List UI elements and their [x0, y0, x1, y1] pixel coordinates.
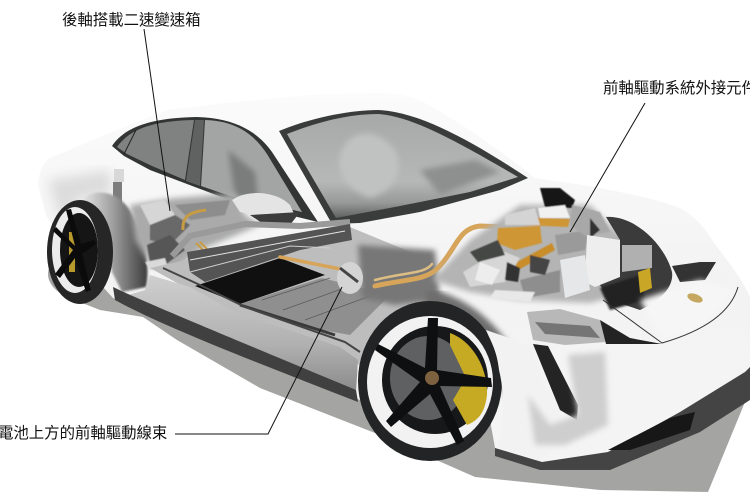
body shell [38, 93, 750, 468]
porsche crest [686, 292, 704, 304]
front wheel well [600, 217, 672, 310]
hood seam [603, 287, 738, 343]
callout: front drive harness above battery [0, 287, 342, 442]
wheel spokes [375, 318, 492, 445]
hood fade over lower front [640, 280, 735, 340]
callout: front drive external components [570, 79, 750, 232]
front splitter [495, 367, 750, 470]
front wheel well components [600, 245, 716, 310]
coolant tank [585, 235, 620, 287]
front wheel [358, 301, 502, 461]
side vent [533, 344, 578, 420]
callout: rear two-speed gearbox: 後軸搭載二速變速箱 [62, 11, 201, 29]
lower intake [608, 412, 695, 450]
brake caliper [450, 333, 487, 425]
callout: front drive harness above battery: 電池上方的前軸驅動線束 [0, 424, 167, 442]
battery pack [163, 224, 390, 352]
orange high-voltage cables [280, 226, 505, 286]
body side sill [125, 275, 358, 392]
front motor and accessories [432, 188, 640, 303]
rear side windows [112, 117, 318, 222]
rear motor to front tube [172, 222, 350, 256]
rear quarter shading [48, 170, 112, 220]
inverter cover [560, 255, 590, 298]
rear wheel [47, 200, 113, 304]
carbon air duct [528, 352, 608, 445]
car body [38, 93, 750, 470]
headlight [527, 309, 662, 345]
windshield and interior [279, 110, 528, 224]
motor hub at battery end [337, 262, 363, 294]
area under battery [150, 225, 430, 365]
rear strut [113, 182, 122, 205]
callout: rear two-speed gearbox [62, 11, 201, 211]
center mid components [358, 245, 440, 305]
rocker strip [113, 287, 358, 402]
rear motor and gearbox [130, 193, 300, 270]
ground shadow [48, 266, 745, 492]
rear wheel arch tread [82, 192, 147, 292]
front fender [486, 330, 580, 460]
front wheel arch tread [425, 300, 516, 392]
